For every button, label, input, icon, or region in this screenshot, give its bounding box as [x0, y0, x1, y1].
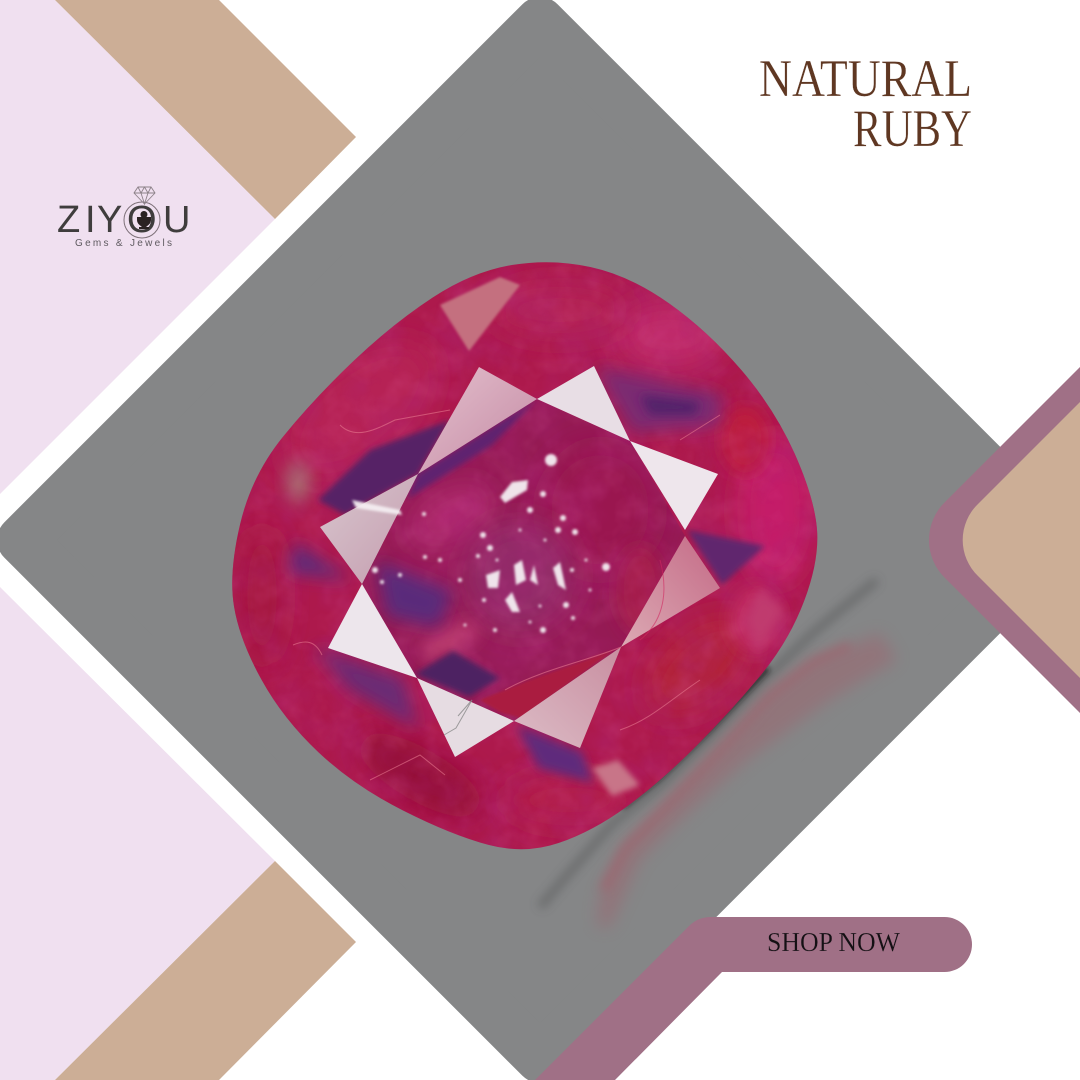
red blurred reflection	[597, 633, 897, 927]
table facet	[362, 399, 685, 721]
panel: bottom-left tan block	[55, 861, 356, 1080]
light mottled texture	[225, 255, 825, 855]
white inclusions	[352, 454, 610, 633]
translucent facet: right	[621, 536, 720, 647]
panel: right mauve diamond	[929, 367, 1080, 713]
title line two: RUBY	[853, 100, 972, 158]
title	[759, 50, 972, 158]
title line one: NATURAL	[759, 50, 972, 108]
logo diamond	[134, 187, 155, 204]
translucent facet: bottom	[514, 647, 621, 748]
gem shadow and reflection	[540, 580, 897, 927]
mottled texture	[225, 255, 825, 855]
lower table facet	[480, 650, 614, 718]
translucent facet: left	[320, 474, 418, 584]
white facet: lower-left	[328, 584, 417, 678]
logo tagline: Gems & Jewels	[75, 238, 172, 249]
panel: right tan diamond	[963, 402, 1080, 678]
facet scratch marks	[444, 700, 472, 735]
icon: ruby gemstone	[225, 255, 825, 855]
gem body	[232, 262, 817, 849]
logo wordmark: ZIYOU	[57, 199, 190, 241]
faint outer shadow	[540, 580, 877, 907]
button label: SHOP NOW	[767, 927, 900, 957]
panel: bottom-left pink block	[0, 587, 275, 1080]
translucent facet: top-left	[418, 367, 537, 474]
pale upper-left facet	[440, 277, 520, 351]
white facet: bottom-left	[417, 678, 514, 757]
lower-right pale pink facet	[592, 760, 640, 796]
cracks and scratches	[293, 410, 720, 780]
colour zones inside gem	[225, 255, 825, 855]
panel: top-left tan block	[55, 0, 356, 219]
button: shop now	[535, 917, 972, 1080]
dark cast shadow core	[622, 668, 768, 806]
white facet: top-right	[537, 366, 630, 441]
white facet: upper-right	[630, 441, 718, 530]
logo ring	[124, 202, 160, 238]
red reflection rim	[603, 645, 850, 890]
lower-right pink edge facet	[747, 593, 786, 644]
logo	[57, 187, 190, 249]
purple patches	[318, 420, 450, 515]
panel: top-left pink block	[0, 0, 275, 494]
button shape	[535, 917, 972, 1080]
logo jewel icon	[137, 211, 151, 229]
